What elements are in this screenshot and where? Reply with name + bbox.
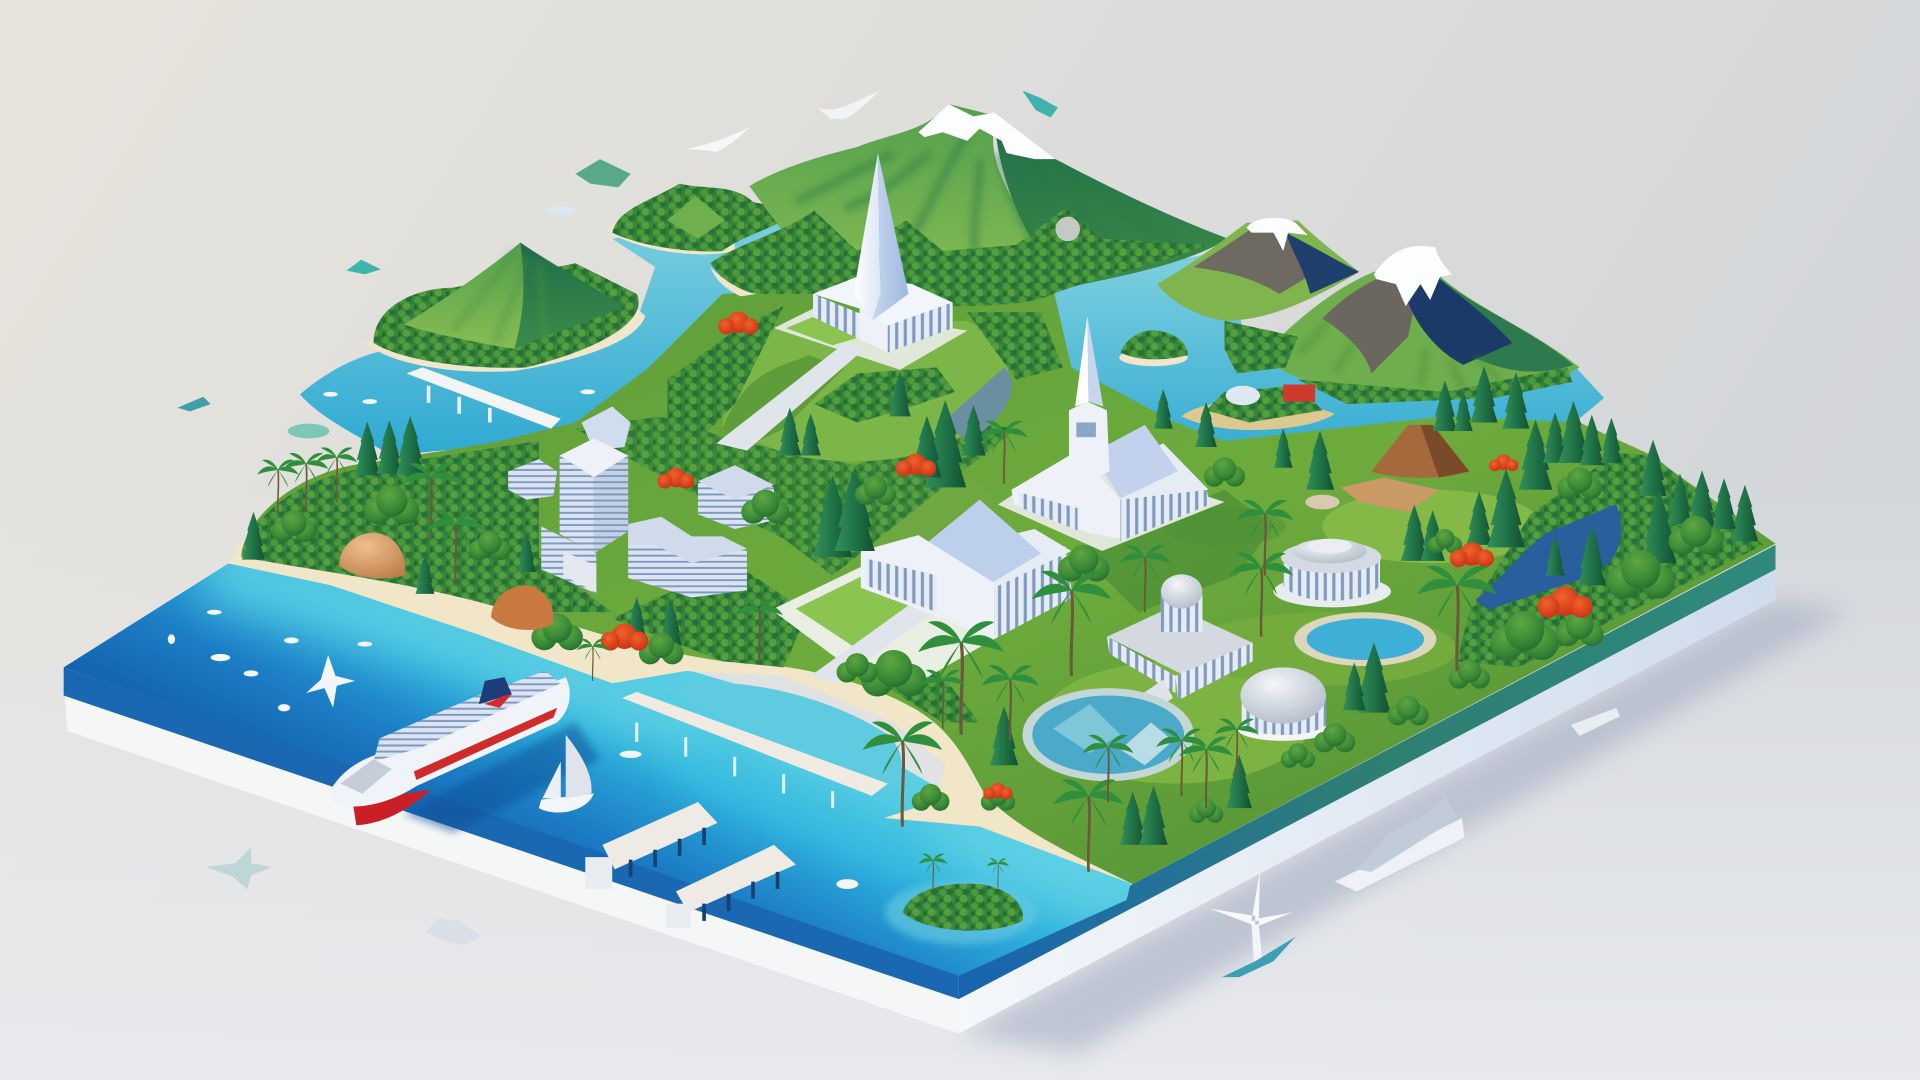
temple one terrace bbox=[774, 306, 967, 370]
mountain shaded side bbox=[994, 116, 1228, 288]
fir trees bbox=[242, 366, 1758, 845]
shallow water near shore bbox=[208, 566, 1139, 894]
ship red keel bbox=[353, 790, 431, 825]
ship stern steps bbox=[340, 759, 392, 793]
ship shadow bbox=[404, 722, 600, 833]
temple one roof bbox=[813, 277, 953, 326]
temple three roof bbox=[924, 500, 1041, 583]
temple one spire bbox=[853, 153, 880, 321]
slab: coloured right band bbox=[959, 545, 1776, 999]
tiny floating islet bbox=[576, 159, 631, 187]
forest: centre bbox=[576, 416, 1016, 576]
forest: right corner bbox=[1457, 453, 1763, 667]
beach bbox=[228, 539, 1163, 884]
mountain ridges bbox=[796, 135, 1188, 276]
tiny boat lagoon bbox=[288, 424, 329, 438]
tiny boat one bbox=[546, 206, 576, 216]
hotel right low blocks bbox=[628, 527, 747, 598]
ship upper deck bbox=[373, 671, 561, 762]
forest below volcanoes bbox=[1224, 321, 1298, 373]
ship funnel bbox=[479, 677, 512, 704]
cruise ship bbox=[331, 671, 570, 825]
temple three bbox=[861, 500, 1073, 639]
front volcano bbox=[1261, 269, 1580, 395]
mountain sunlit side bbox=[749, 104, 1065, 294]
forest: lower centre bbox=[612, 563, 808, 667]
sea surface bbox=[64, 561, 1133, 976]
hotel tower bbox=[560, 456, 594, 553]
temple two front gable bbox=[1011, 451, 1120, 539]
red flowering bushes bbox=[601, 312, 1592, 799]
temple one with spire bbox=[774, 153, 967, 370]
floor mini ship bbox=[1335, 796, 1464, 891]
temple one right columns bbox=[888, 302, 953, 353]
hotel left low block bbox=[541, 527, 596, 594]
sea ornaments bbox=[168, 389, 858, 889]
slab shadow bbox=[959, 600, 1849, 1053]
long pier bbox=[622, 692, 888, 808]
island sand bbox=[365, 297, 645, 372]
temple one left columns bbox=[813, 294, 860, 339]
tiny teal fish left bbox=[347, 260, 381, 274]
back lagoon water bbox=[300, 208, 1604, 471]
slab: blue front band bbox=[64, 667, 959, 999]
floor wind turbine bbox=[1210, 871, 1296, 977]
short pier one bbox=[585, 802, 718, 889]
small islet in the sea bbox=[885, 854, 1037, 944]
bridge bbox=[407, 367, 561, 429]
ship red stripe bbox=[414, 708, 557, 780]
grey boulder bbox=[1056, 217, 1080, 241]
slab: white left side bbox=[64, 680, 959, 1033]
island ridges bbox=[453, 251, 545, 343]
hotel complex bbox=[508, 407, 774, 598]
floor pebbles bbox=[426, 918, 481, 945]
island mountain bbox=[404, 242, 569, 349]
left island bbox=[365, 242, 645, 372]
dome pavilion one bbox=[1273, 539, 1391, 607]
temple two base bbox=[998, 453, 1224, 551]
hotel small rear block bbox=[508, 459, 557, 500]
palm trees bbox=[257, 421, 1497, 872]
island forest bbox=[373, 263, 639, 368]
twin volcanoes bbox=[1157, 218, 1580, 395]
tiny teal boat far left bbox=[178, 397, 211, 411]
lawn highlights bbox=[771, 459, 1543, 784]
temple two right wing bbox=[1120, 487, 1210, 541]
dome pavilion with roof bbox=[1107, 574, 1253, 716]
mountain snow cap bbox=[918, 104, 1056, 159]
hill bushes bbox=[814, 367, 955, 422]
beach under forest bbox=[710, 267, 757, 296]
floor starfish bbox=[206, 847, 272, 889]
hotel rear block bbox=[698, 465, 774, 529]
main land bbox=[241, 288, 1776, 884]
bushes bbox=[272, 457, 1723, 823]
temple one stairs bbox=[716, 343, 864, 451]
slab: white right side bbox=[959, 563, 1776, 1033]
back left island bbox=[606, 184, 796, 254]
temple two tower bbox=[1069, 402, 1109, 484]
small lagoon islet bbox=[1119, 330, 1188, 366]
main snow mountain bbox=[749, 104, 1228, 294]
blue cliff bbox=[1476, 504, 1621, 610]
volcano streaks bbox=[1298, 321, 1500, 389]
temple three lawn bbox=[771, 566, 998, 686]
aquarium pool bbox=[1022, 688, 1194, 781]
round pool bbox=[1294, 612, 1436, 666]
forest: left shore bbox=[241, 441, 612, 612]
temple two bbox=[998, 316, 1224, 551]
temple three stairs bbox=[811, 600, 937, 683]
floor mini boat bbox=[1571, 708, 1620, 736]
temple one entrance bbox=[860, 309, 888, 353]
short pier two bbox=[666, 845, 796, 928]
teal bird bbox=[1022, 91, 1058, 118]
temple two spire bbox=[1075, 316, 1089, 407]
lagoon inlet bbox=[667, 683, 902, 790]
temple two main roof bbox=[1092, 425, 1178, 498]
ship hull bbox=[331, 677, 570, 806]
seashell domes bbox=[339, 533, 553, 630]
temple three gable bbox=[861, 535, 994, 639]
flag islet bbox=[1182, 384, 1335, 430]
dome pavilion two bbox=[1238, 667, 1329, 741]
bird two bbox=[686, 127, 749, 152]
sailboat bbox=[539, 735, 594, 813]
central hill bbox=[722, 321, 1012, 461]
bird one bbox=[818, 91, 879, 119]
back volcano bbox=[1157, 220, 1359, 321]
temple three right wing bbox=[994, 546, 1073, 639]
forest below main mountain bbox=[710, 208, 1206, 306]
conical hut village bbox=[1305, 425, 1469, 512]
